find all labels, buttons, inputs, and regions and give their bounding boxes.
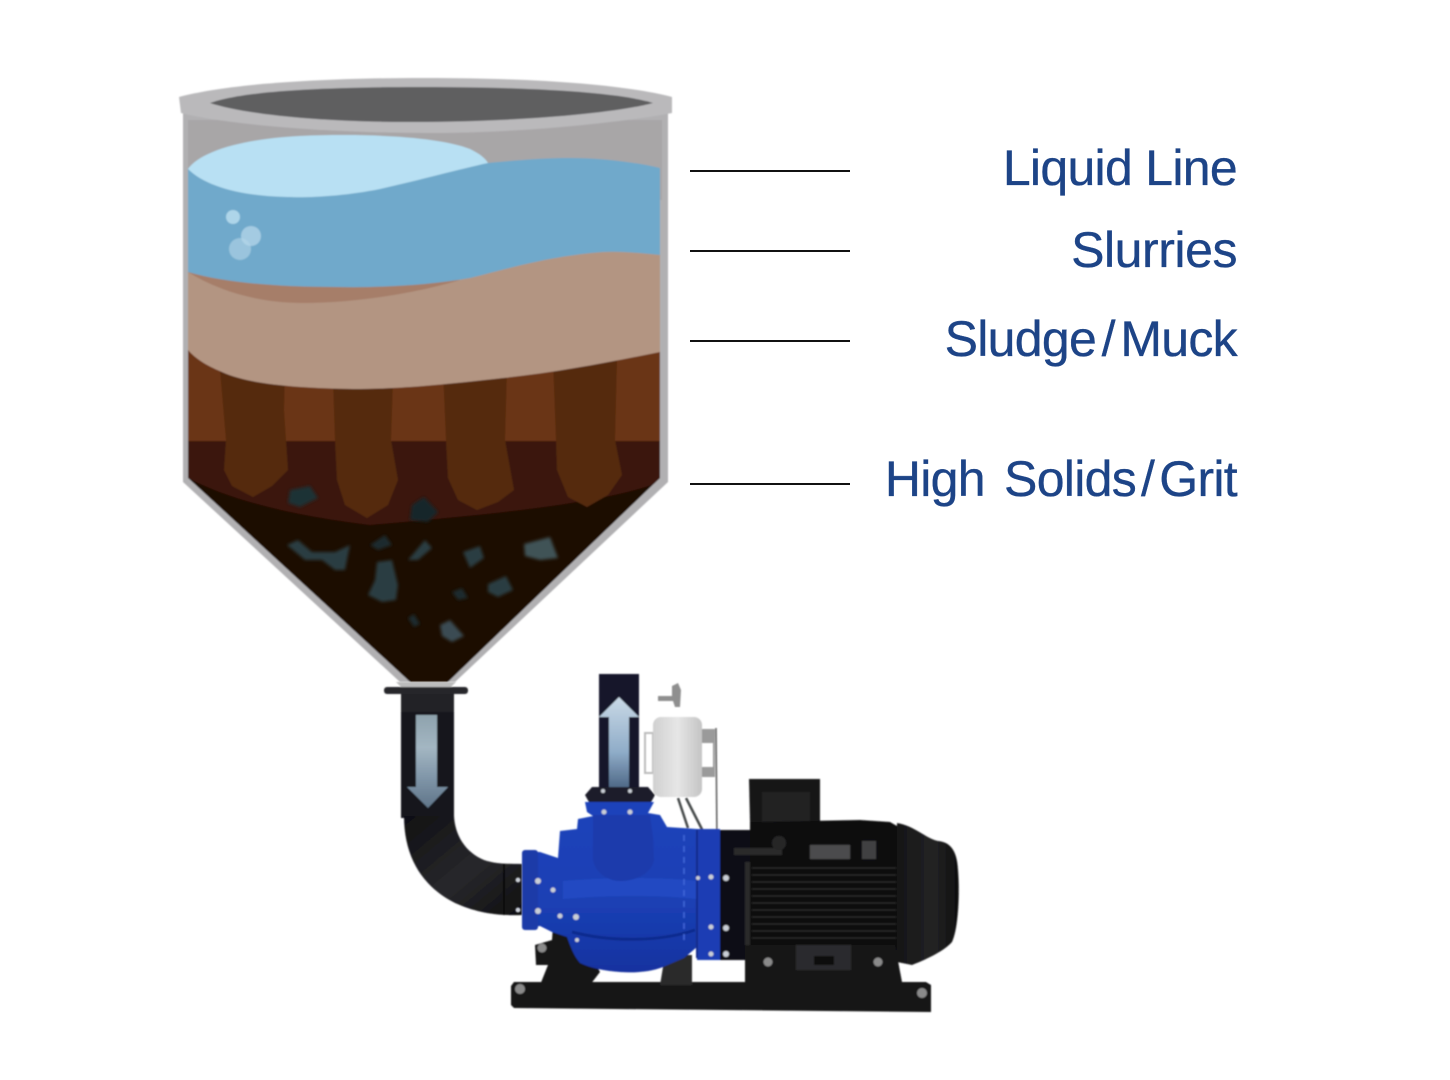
base rail	[511, 982, 931, 1012]
volute casing	[522, 802, 720, 972]
rocks	[287, 486, 558, 642]
pump assembly	[511, 674, 959, 1012]
tank opening	[210, 87, 653, 122]
discharge pipe	[599, 674, 639, 797]
tank	[179, 78, 672, 682]
connection pipe	[384, 682, 522, 915]
layer: high solids base	[188, 478, 657, 682]
bolts	[516, 789, 729, 957]
casing band	[563, 878, 697, 899]
layer: liquid line light blue	[188, 135, 488, 197]
hoses	[678, 798, 710, 845]
vertical pipe	[401, 694, 454, 818]
support legs	[535, 925, 600, 985]
tank interior back wall	[188, 120, 662, 200]
white canister	[645, 683, 717, 845]
cone outlet collar	[396, 682, 456, 690]
junction box	[749, 779, 820, 822]
fan cover	[897, 823, 959, 965]
label: liquid line: Liquid Line	[1003, 140, 1237, 196]
neck	[593, 815, 654, 881]
label: high solids/grit: High Solids/Grit	[885, 451, 1238, 507]
down arrow	[407, 715, 448, 808]
blue pump body	[516, 787, 729, 972]
tank rim	[179, 78, 672, 133]
nameplate	[810, 845, 850, 859]
brown columns	[220, 360, 622, 518]
bracket	[702, 729, 715, 777]
up arrow	[599, 697, 639, 797]
layer: slurries blue	[188, 150, 660, 287]
motor	[717, 779, 959, 982]
cooling fins	[752, 868, 896, 938]
layer: tan sludge	[188, 240, 660, 389]
canister body	[653, 717, 702, 797]
motor adapter	[717, 830, 752, 960]
outlet flange	[585, 787, 655, 804]
layers clipped	[188, 135, 660, 682]
tan shadow	[188, 270, 460, 303]
elbow pipe	[404, 816, 522, 915]
layer: sludge brown	[188, 340, 660, 441]
label: slurries: Slurries	[1071, 222, 1237, 278]
casing seam	[572, 930, 695, 939]
left inlet flange	[522, 850, 538, 930]
motor body	[750, 820, 897, 960]
label: sludge/muck: Sludge/Muck	[945, 311, 1239, 367]
motor feet	[745, 945, 902, 982]
valve	[658, 683, 681, 707]
layer: grit transition	[188, 440, 660, 525]
right flange	[697, 829, 720, 960]
pipe flange	[384, 687, 468, 694]
tank shell	[183, 110, 668, 682]
bubbles	[226, 210, 261, 260]
